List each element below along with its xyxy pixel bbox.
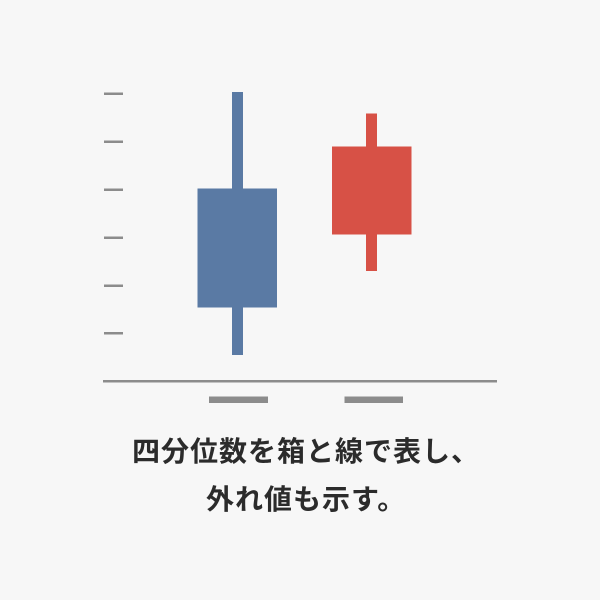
x-axis baseline <box>103 380 497 382</box>
blue box and whisker <box>198 92 277 355</box>
category label placeholder: blue <box>209 396 268 403</box>
category label placeholder: red <box>344 396 403 403</box>
caption line 2: 外れ値も示す。 <box>206 484 406 515</box>
red box and whisker <box>332 114 412 271</box>
caption line 1: 四分位数を箱と線で表し、 <box>132 436 480 467</box>
y-axis tick marks <box>104 92 123 334</box>
